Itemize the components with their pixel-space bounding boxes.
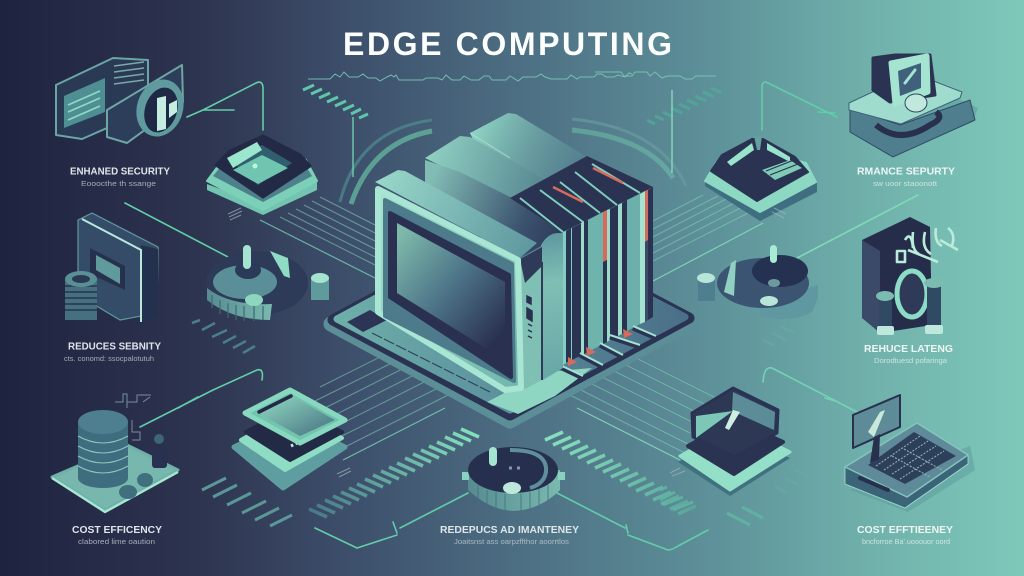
screen stripes bbox=[68, 91, 100, 120]
pale C ring bbox=[510, 450, 546, 488]
connector line: lower left strong bbox=[343, 408, 445, 460]
gear skirt bbox=[760, 285, 818, 319]
rack vertical slats bbox=[563, 187, 653, 365]
glint bbox=[905, 70, 915, 83]
caption: Joaitsnst ass oarpzffthor aoorrtlos bbox=[454, 537, 569, 546]
label: reduce latency: REHUCE LATENG bbox=[864, 343, 953, 355]
connector lines: upper left bbox=[280, 197, 375, 265]
base plate bbox=[331, 224, 691, 421]
circuit line under title bbox=[308, 72, 716, 81]
dial: middle left bbox=[206, 245, 329, 321]
base bbox=[207, 182, 317, 215]
upper panel stripes bbox=[114, 62, 144, 84]
slate ring bbox=[213, 140, 312, 202]
small marks under nodes bbox=[228, 208, 786, 477]
base bbox=[234, 420, 345, 488]
middle unit bbox=[425, 133, 563, 258]
label: enhanced security: ENHANED SECURITY bbox=[70, 166, 170, 178]
inner light bbox=[233, 155, 288, 184]
hood bbox=[692, 388, 778, 457]
left pillar bbox=[876, 291, 894, 335]
dome bbox=[717, 258, 809, 308]
label: cost efficiency left bbox=[72, 524, 162, 546]
board edge bbox=[141, 245, 158, 325]
front unit face bbox=[378, 189, 521, 390]
keyboard rows bbox=[876, 436, 944, 479]
caption: bncforroe Ba'.uooouor oord bbox=[862, 537, 950, 546]
right pillar bbox=[924, 278, 944, 334]
hood glint bbox=[725, 410, 740, 430]
front unit frame bbox=[390, 213, 511, 377]
arrow: bottom center left bbox=[315, 493, 468, 548]
dashed band: top left bbox=[303, 85, 368, 118]
small knob bbox=[760, 296, 778, 306]
gear skirt bbox=[468, 470, 560, 511]
light rim bbox=[705, 150, 816, 212]
caption: Eooocthe th ssange bbox=[81, 179, 156, 188]
ticks band bbox=[291, 420, 343, 446]
label: reduce latency bbox=[864, 343, 953, 365]
gear ribs bbox=[478, 485, 548, 511]
label: cost efficiency left: COST EFFICENCY bbox=[72, 524, 162, 536]
dashed band: left middle bbox=[192, 320, 255, 353]
connector line: upper right strong bbox=[653, 223, 763, 281]
arrow: lower left bbox=[140, 370, 262, 427]
side stripes bbox=[766, 160, 798, 175]
hub bbox=[235, 261, 261, 279]
node: top right bbox=[705, 136, 817, 221]
camera body bbox=[107, 65, 183, 143]
icon: database on platform (bottom left) bbox=[52, 394, 178, 512]
board edge highlight bbox=[82, 219, 141, 322]
right tab bbox=[767, 143, 790, 162]
icon: lock block (right middle) bbox=[862, 217, 958, 335]
keyboard bbox=[868, 432, 956, 484]
rear monitor bbox=[56, 58, 148, 139]
dark hub ring bbox=[752, 255, 808, 287]
arrow: right middle line bbox=[797, 195, 918, 258]
connector lines: lower left bbox=[315, 347, 470, 457]
label: cost efficiency right: COST EFFTIEENEY bbox=[857, 524, 953, 536]
chip bbox=[90, 248, 125, 290]
front unit screen bbox=[397, 223, 505, 360]
dark body bbox=[711, 139, 808, 201]
front unit side panel bbox=[520, 247, 542, 390]
teeth bbox=[212, 295, 263, 321]
dome bbox=[468, 447, 558, 493]
dashed band: lower left outer bbox=[202, 478, 292, 526]
dashed band: lower left bbox=[309, 429, 479, 517]
icon: console with keyboard (bottom right) bbox=[845, 395, 975, 512]
pin bbox=[489, 447, 497, 466]
pale wedge bbox=[270, 251, 290, 278]
connector line: upper left strong bbox=[260, 220, 375, 278]
top panel frame bbox=[245, 390, 345, 443]
front unit bezel bbox=[385, 200, 514, 381]
side tabs bbox=[462, 472, 565, 480]
label: cost efficiency right bbox=[857, 524, 953, 546]
pin bbox=[770, 245, 777, 263]
label: enhanced security bbox=[70, 166, 170, 188]
connector lines: upper right bbox=[653, 195, 760, 261]
rack slat highlights bbox=[520, 164, 640, 232]
board bbox=[78, 213, 158, 320]
shadow bbox=[850, 95, 978, 155]
dome bbox=[206, 251, 308, 315]
monitor bbox=[853, 395, 900, 448]
dashed band: top right bbox=[647, 88, 722, 124]
signal arcs right bbox=[572, 90, 686, 186]
dial: middle right bbox=[697, 245, 818, 319]
ring bbox=[897, 271, 927, 317]
rack pegs highlight bbox=[560, 326, 656, 376]
node: bottom right bbox=[678, 388, 790, 496]
bottle bbox=[152, 434, 167, 468]
side dark line bbox=[541, 262, 543, 380]
dashed band: lower right bbox=[545, 432, 696, 514]
screen glass bbox=[898, 63, 921, 96]
lower tray bbox=[241, 412, 342, 470]
block side bbox=[862, 240, 880, 333]
pale rim bbox=[207, 138, 317, 210]
slate base bbox=[678, 435, 790, 496]
front unit dark side bbox=[520, 247, 542, 283]
arrow: left middle line bbox=[125, 203, 230, 258]
under body bbox=[850, 100, 975, 157]
label: romance security bbox=[857, 166, 955, 188]
label: reduces security bbox=[64, 340, 161, 363]
caption: clabored lime oaution bbox=[78, 537, 155, 546]
ports bbox=[860, 478, 888, 490]
arrow: bottom center right bbox=[557, 493, 708, 550]
lens glint bbox=[157, 96, 177, 131]
label: reduces security: REDUCES SEBNITY bbox=[68, 340, 161, 352]
platform bbox=[52, 445, 178, 510]
slate base bbox=[705, 178, 817, 221]
dashed band: right middle faint bbox=[763, 326, 809, 493]
lens ring bbox=[129, 73, 191, 143]
deck top bbox=[845, 423, 968, 497]
central server bbox=[331, 113, 691, 421]
caption: cts. conomd: ssocpalotutuh bbox=[64, 354, 154, 363]
label: romance security: RMANCE SEPURTY bbox=[857, 166, 955, 178]
label: center bottom: REDEPUCS AD IMANTENEY bbox=[440, 524, 579, 536]
red accents bbox=[568, 329, 633, 366]
inner bay bbox=[230, 145, 292, 185]
arrow: top right bbox=[762, 82, 837, 130]
indicator bbox=[252, 164, 258, 168]
pin bbox=[243, 245, 251, 269]
screen frame bbox=[891, 56, 928, 104]
back unit bbox=[470, 113, 587, 200]
dial: bottom center bbox=[462, 447, 565, 511]
title: EDGE COMPUTING bbox=[343, 26, 672, 62]
rack pegs bbox=[560, 328, 656, 378]
chip bbox=[762, 160, 802, 180]
coin stack bbox=[65, 271, 97, 320]
small cylinder bbox=[697, 273, 715, 301]
dark band bbox=[688, 420, 783, 474]
hood right glass bbox=[732, 392, 775, 430]
wire doodle bbox=[115, 394, 151, 440]
rack slats top bbox=[510, 156, 653, 232]
loop bbox=[905, 94, 927, 112]
icon: chip board and coin stack (left middle) bbox=[65, 213, 158, 325]
screen back bbox=[873, 55, 935, 102]
small domes bbox=[119, 473, 153, 499]
center notch bbox=[754, 136, 762, 150]
node: top left bbox=[207, 136, 317, 215]
dark belt bbox=[876, 112, 939, 135]
left tab bbox=[727, 143, 754, 166]
pale tab bbox=[227, 142, 262, 168]
icon: secure terminal (top right) bbox=[849, 55, 978, 157]
hub lights bbox=[509, 466, 520, 470]
chip detail bbox=[96, 255, 120, 284]
cylinder bbox=[78, 410, 128, 488]
light tray bbox=[680, 424, 790, 490]
platform edge bbox=[52, 472, 178, 512]
connector line: lower right strong bbox=[577, 408, 680, 460]
monitor screen bbox=[64, 78, 105, 128]
icon: camera and monitor (top left) bbox=[56, 58, 191, 143]
hood left glass bbox=[696, 411, 733, 438]
dark body bbox=[216, 136, 310, 197]
shadow bbox=[850, 446, 975, 512]
top panel bbox=[258, 396, 335, 436]
signal arcs left bbox=[340, 117, 432, 204]
front knob bbox=[503, 482, 521, 494]
gear skirt bbox=[207, 288, 272, 320]
dome lower ring bbox=[213, 265, 277, 299]
front unit top bbox=[375, 170, 537, 258]
caption: sw uoor staoonott bbox=[873, 179, 938, 188]
small knob bbox=[245, 294, 263, 306]
dashed band: lower right outer bbox=[660, 487, 763, 525]
connector lines: lower right bbox=[570, 350, 730, 453]
small cylinder bbox=[311, 273, 329, 300]
deck side bbox=[845, 455, 968, 508]
dark core bbox=[246, 408, 342, 460]
deck bbox=[849, 73, 962, 124]
squiggle glyphs bbox=[897, 228, 958, 262]
hub detail bbox=[768, 279, 780, 287]
front unit right wall bbox=[541, 233, 563, 380]
rack red highlights bbox=[553, 168, 623, 202]
vent icons bbox=[527, 296, 532, 338]
block bbox=[862, 217, 932, 333]
panel slot bbox=[259, 396, 291, 412]
caption: Dorodtuesd pofaringa bbox=[874, 356, 948, 365]
lens interior bbox=[139, 83, 183, 137]
pale wedge bbox=[724, 260, 736, 296]
node: bottom left bbox=[234, 390, 345, 488]
label: center bottom bbox=[440, 524, 579, 546]
arrow: lower right bbox=[763, 368, 857, 412]
stand bbox=[870, 434, 880, 463]
arrow: top left bbox=[187, 82, 263, 130]
monitor reflection bbox=[868, 410, 885, 437]
